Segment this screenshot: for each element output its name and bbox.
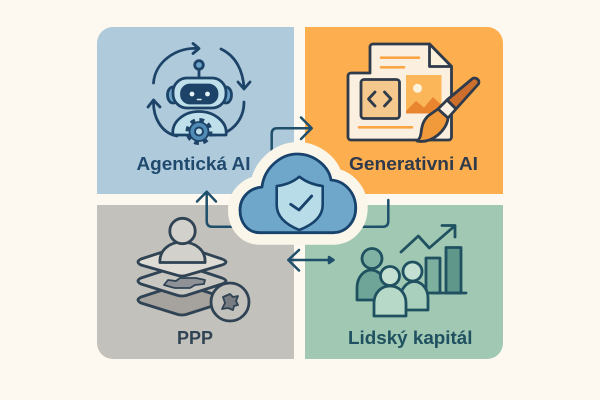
icon: robot with cycle arrows — [148, 44, 250, 142]
bar chart — [426, 248, 466, 293]
document sheet — [348, 44, 452, 140]
growth arrow — [401, 226, 455, 252]
panel background: green — [305, 205, 503, 359]
icon: document with code, image and brush — [348, 44, 479, 141]
panel: Agentická AI — [97, 27, 294, 194]
icon: paint brush — [417, 78, 479, 141]
panel: Lidský kapitál — [305, 205, 503, 359]
top layer — [138, 246, 226, 276]
document fold — [430, 44, 452, 66]
label: Lidský kapitál: Lidský kapitál — [348, 328, 472, 348]
bottom layer — [138, 284, 226, 315]
person: right — [400, 262, 428, 310]
code box — [361, 80, 400, 118]
cloud halo — [240, 154, 356, 233]
robot body — [173, 112, 226, 135]
robot head — [173, 78, 226, 108]
person — [160, 218, 205, 262]
person: back left — [357, 248, 386, 300]
label: Generativni AI: Generativni AI — [349, 154, 478, 174]
arrow: to Generativni AI — [272, 118, 312, 152]
panel background: orange — [305, 27, 503, 194]
icon: layered stack with person — [138, 218, 249, 321]
person: front — [374, 266, 406, 316]
label: Agentická AI: Agentická AI — [136, 154, 250, 174]
icon: check mark — [291, 196, 312, 210]
icon: shield — [277, 177, 323, 230]
middle layer — [138, 266, 226, 296]
icon: gear — [188, 121, 210, 142]
icon: team and growth chart — [357, 226, 466, 316]
panel: PPP — [97, 205, 294, 359]
badge with gear — [211, 283, 249, 321]
panel background: blue — [97, 27, 294, 194]
label: PPP: PPP — [177, 328, 213, 348]
center: cloud with shield — [240, 154, 356, 233]
gear fragment — [164, 278, 205, 288]
cycle arrows — [148, 44, 250, 136]
panel background: grey — [97, 205, 294, 359]
arrow: connector to Lidský kapitál — [361, 200, 388, 227]
arrow: double-headed between PPP and Lidský kapitál — [288, 250, 334, 270]
text lines — [359, 58, 419, 127]
arrow: to Agentická AI — [197, 192, 234, 227]
cloud — [240, 154, 356, 233]
image thumbnail — [406, 75, 442, 114]
robot antenna — [195, 61, 203, 78]
robot ears — [168, 87, 232, 103]
robot face — [182, 85, 217, 103]
panel: Generativni AI — [305, 27, 503, 194]
